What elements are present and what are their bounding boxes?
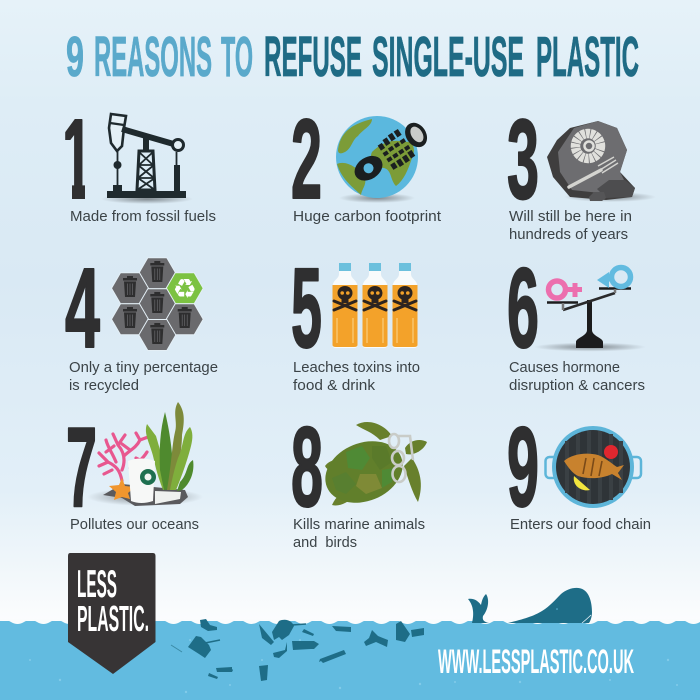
- caption: is recycled: [69, 377, 139, 394]
- icon: hexagon bins: [112, 258, 203, 350]
- text: PLASTIC.: [77, 598, 149, 639]
- panel: reason 4 recycling: [65, 245, 218, 394]
- panel: reason 1 fossil fuels: 1: [62, 96, 92, 222]
- icon: fossil rock with fork: [547, 121, 656, 202]
- number 3: 3: [507, 96, 539, 222]
- panel: reason 6 hormones: [507, 245, 646, 394]
- caption: Made from fossil fuels: [70, 208, 216, 225]
- icon: hexagon bins: ♻: [173, 274, 197, 305]
- panel: reason 7 oceans: 7: [66, 404, 97, 530]
- caption: Leaches toxins into: [293, 359, 420, 376]
- caption: [293, 359, 420, 394]
- title: 9: [66, 25, 84, 89]
- panel: reason 7 oceans: [66, 402, 203, 533]
- panel: reason 2 carbon footprint: 2: [291, 96, 322, 222]
- caption: [293, 516, 425, 551]
- icon: turtle with plastic rings: [316, 422, 427, 514]
- caption: food & drink: [293, 377, 376, 394]
- caption: [509, 208, 632, 243]
- sea: [0, 621, 700, 700]
- caption: Huge carbon footprint: [293, 208, 442, 225]
- panel: reason 5 toxins: [291, 245, 420, 394]
- caption: Enters our food chain: [510, 516, 651, 533]
- panel: reason 8 marine animals: [291, 404, 427, 551]
- number 4: 4: [65, 245, 100, 371]
- title: REASONS: [94, 25, 212, 89]
- icon: balance scale with gender symbols: [534, 268, 646, 352]
- title: TO: [221, 25, 253, 89]
- wave edge: [0, 619, 700, 624]
- badge: Less Plastic: [68, 553, 156, 674]
- number 9: 9: [507, 404, 539, 530]
- number 6: 6: [507, 245, 539, 371]
- badge: Less Plastic: LESS: [77, 563, 117, 606]
- title: REFUSE: [264, 25, 362, 89]
- number 8: 8: [291, 404, 323, 530]
- panel: reason 2 carbon footprint: [291, 96, 442, 225]
- caption: disruption & cancers: [509, 377, 645, 394]
- icon: bottles with skulls: [332, 263, 418, 348]
- icon: coral, seaweed and cup: [87, 402, 203, 506]
- caption: Will still be here in: [509, 208, 632, 225]
- caption: Only a tiny percentage: [69, 359, 218, 376]
- caption: [69, 359, 218, 394]
- whale: [468, 588, 592, 623]
- caption: Causes hormone: [509, 359, 620, 376]
- panel: reason 3 hundreds of years: [507, 96, 656, 243]
- caption: [509, 359, 645, 394]
- title: [66, 25, 639, 89]
- panel: reason 9 food chain: [507, 404, 651, 533]
- caption: hundreds of years: [509, 226, 628, 243]
- panel: reason 5 toxins: 5: [291, 245, 322, 371]
- caption: Kills marine animals: [293, 516, 425, 533]
- panel: reason 1 fossil fuels: [65, 112, 216, 221]
- floating plastic debris: [171, 619, 424, 681]
- icon: globe with boot print: [336, 116, 434, 203]
- icon: grill pan with fish: [546, 426, 641, 508]
- icon: oil pump jack: [101, 114, 193, 204]
- caption: and birds: [293, 534, 357, 551]
- caption: Pollutes our oceans: [70, 516, 199, 533]
